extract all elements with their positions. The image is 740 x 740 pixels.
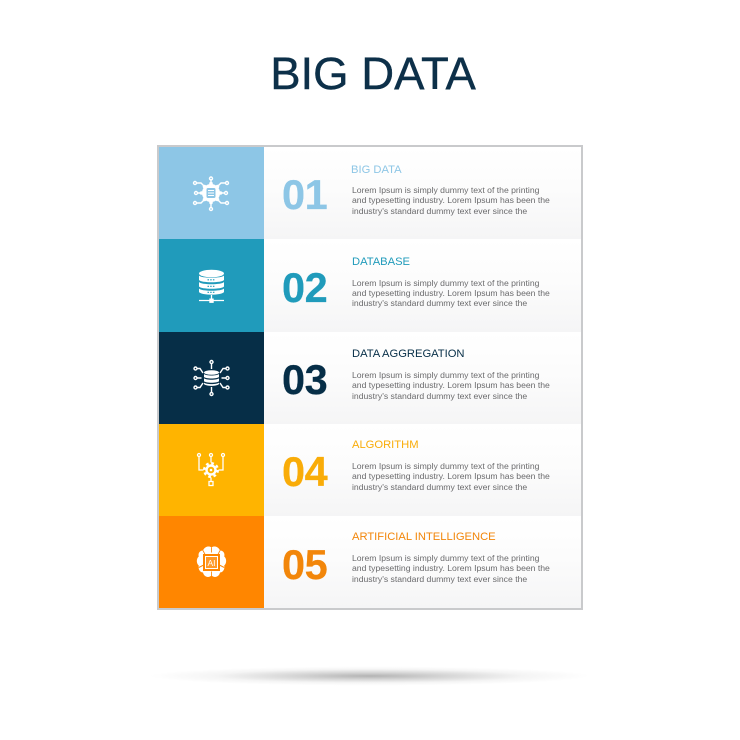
body text xyxy=(352,370,550,401)
body text: Lorem Ipsum is simply dummy text of the printing xyxy=(352,461,539,471)
colour block 5 xyxy=(159,516,264,608)
body text xyxy=(352,278,550,308)
number 03: 03 xyxy=(282,356,327,403)
ground shadow xyxy=(150,661,590,691)
panel: list frame xyxy=(157,145,583,610)
body text xyxy=(352,461,550,492)
colour block 4 xyxy=(159,424,264,516)
icon: gear flow xyxy=(196,452,226,486)
icon: database server xyxy=(199,270,224,303)
row 1: big data xyxy=(159,147,581,239)
row 2: database xyxy=(159,239,581,332)
body text: and typesetting industry. Lorem Ipsum has been the xyxy=(352,288,550,298)
colour block 2 xyxy=(159,239,264,332)
body text: and typesetting industry. Lorem Ipsum has been the xyxy=(352,563,550,573)
icon: data gear network xyxy=(192,176,230,212)
body text: Lorem Ipsum is simply dummy text of the printing xyxy=(352,185,539,195)
icon: database network xyxy=(193,360,230,396)
heading: ALGORITHM xyxy=(352,439,419,451)
row 4: algorithm xyxy=(159,424,581,516)
body text: Lorem Ipsum is simply dummy text of the printing xyxy=(352,278,539,288)
title: BIG DATA xyxy=(270,48,476,99)
number 05: 05 xyxy=(282,541,327,588)
body text: industry's standard dummy text ever since the xyxy=(352,574,527,584)
number 01: 01 xyxy=(282,171,327,218)
body text: industry's standard dummy text ever since the xyxy=(352,298,527,308)
colour block 1 xyxy=(159,147,264,239)
row 3: data aggregation xyxy=(159,332,581,424)
icon: AI brain chip: AI xyxy=(207,558,216,568)
heading: DATA AGGREGATION xyxy=(352,348,465,360)
body text xyxy=(352,185,550,216)
number 04: 04 xyxy=(282,448,327,495)
icon: AI brain chip xyxy=(196,546,226,577)
row 5: artificial intelligence xyxy=(159,516,581,608)
body text: Lorem Ipsum is simply dummy text of the printing xyxy=(352,553,539,563)
body text xyxy=(352,553,550,584)
heading: BIG DATA xyxy=(351,164,402,176)
heading: ARTIFICIAL INTELLIGENCE xyxy=(352,531,496,543)
body text: and typesetting industry. Lorem Ipsum has been the xyxy=(352,471,550,481)
body text: Lorem Ipsum is simply dummy text of the printing xyxy=(352,370,539,380)
heading: DATABASE xyxy=(352,256,410,268)
body text: and typesetting industry. Lorem Ipsum has been the xyxy=(352,380,550,390)
body text: industry's standard dummy text ever since the xyxy=(352,206,527,216)
body text: industry's standard dummy text ever since the xyxy=(352,391,527,401)
colour block 3 xyxy=(159,332,264,424)
body text: and typesetting industry. Lorem Ipsum has been the xyxy=(352,195,550,205)
number 02: 02 xyxy=(282,264,327,311)
body text: industry's standard dummy text ever since the xyxy=(352,482,527,492)
